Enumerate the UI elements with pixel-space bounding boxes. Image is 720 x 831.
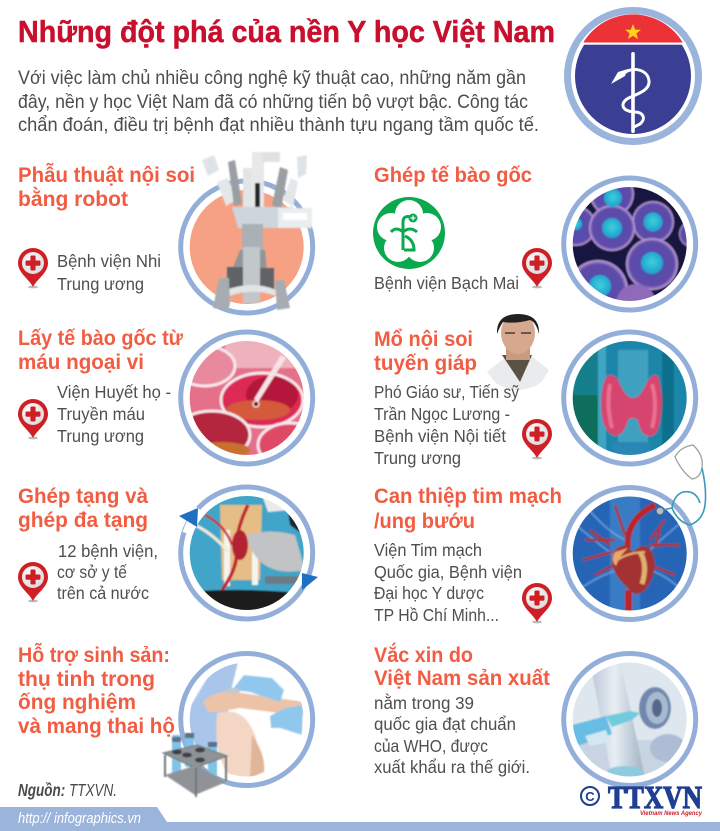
institutes text: TP Hồ Chí Minh... [374, 605, 499, 625]
description text: nằm trong 39 [374, 692, 474, 713]
heading: và mang thai hộ [18, 715, 175, 738]
institute text: Viện Huyết họ - [57, 382, 171, 402]
panel: organ transplant [18, 485, 318, 619]
intro text: đây, nền y học Việt Nam đã có những tiến bộ vượt bậc. Công tác [18, 92, 528, 113]
hospital text: Bệnh viện Bạch Mai [374, 273, 519, 293]
intro text: Với việc làm chủ nhiều công nghệ kỹ thuật cao, những năm gần [18, 68, 526, 89]
heading [18, 643, 175, 738]
icon: stethoscope [656, 445, 706, 525]
panel: reproductive support [18, 643, 313, 797]
intro text: chẩn đoán, điều trị bệnh đạt nhiều thành tựu ngang tầm quốc tế. [18, 115, 539, 136]
heading: tuyến giáp [374, 352, 477, 375]
heading [374, 643, 550, 690]
image: pregnant woman [181, 654, 313, 786]
heading: Lấy tế bào gốc từ [18, 327, 184, 350]
hospital text [57, 541, 158, 603]
image: stem cells [561, 176, 698, 312]
copyright mark: C [585, 789, 595, 804]
credentials text [374, 382, 519, 468]
image: vaccine vial and syringe [564, 654, 696, 786]
intro text [18, 68, 539, 136]
image: thyroid [564, 332, 696, 464]
description text [374, 692, 530, 777]
description text: quốc gia đạt chuẩn [374, 714, 516, 734]
institute text: Truyền máu [57, 404, 145, 424]
panel: cardiovascular / oncology intervention [374, 485, 696, 625]
credentials text: Trần Ngọc Lương - [374, 404, 510, 424]
icon: health ministry emblem [568, 10, 698, 142]
heading: Hỗ trợ sinh sản: [18, 643, 170, 667]
panel: peripheral blood stem cells [18, 327, 322, 467]
heading: Việt Nam sản xuất [374, 667, 550, 690]
heading [374, 328, 477, 375]
pin icon [522, 248, 552, 288]
panel: robotic surgery [18, 152, 313, 313]
heading: Ghép tạng và [18, 485, 148, 508]
heading: ghép đa tạng [18, 509, 148, 532]
source note: Nguồn: TTXVN. [18, 780, 117, 800]
website url: http:// infographics.vn [18, 810, 141, 827]
pin icon [522, 583, 552, 623]
heading: ống nghiệm [18, 691, 136, 714]
tagline: Vietnam News Agency [640, 810, 702, 817]
heading: bằng robot [18, 187, 128, 211]
arrow: lower right [302, 573, 318, 590]
hospital text: cơ sở y tế [57, 562, 127, 582]
institute text [57, 382, 171, 446]
hospital text: trên cả nước [57, 583, 149, 603]
logo: Bach Mai hospital [373, 197, 445, 269]
wordmark: TTXVN [608, 779, 702, 815]
heading [18, 327, 184, 374]
heading [18, 163, 195, 211]
footer bar [0, 807, 720, 831]
image: surgical robot [181, 152, 313, 313]
institutes text: Quốc gia, Bệnh viện [374, 562, 522, 582]
description text: của WHO, được [374, 736, 488, 756]
hospital text: Bệnh viện Nhi [57, 251, 161, 271]
heading: thụ tinh trong [18, 668, 155, 691]
credentials text: Trung ương [374, 448, 461, 468]
arrow: upper left [179, 508, 199, 533]
image: heart [564, 488, 696, 620]
hospital text: 12 bệnh viện, [58, 541, 158, 561]
institutes text: Đại học Y dược [374, 583, 484, 603]
heading: Phẫu thuật nội soi [18, 163, 195, 187]
panel: stem cell transplant [373, 164, 705, 324]
heading: Mổ nội soi [374, 328, 473, 351]
credentials text: Bệnh viện Nội tiết [374, 426, 506, 446]
portrait: doctor [487, 312, 549, 391]
heading: Vắc xin do [374, 643, 473, 667]
heading: /ung bướu [374, 510, 475, 533]
heading: Can thiệp tim mạch [374, 485, 562, 508]
credentials text: Phó Giáo sư, Tiến sỹ [374, 382, 519, 402]
institutes text [374, 540, 522, 625]
heading [374, 485, 562, 533]
pin icon [18, 399, 48, 439]
pin icon [522, 419, 552, 459]
icon: test tube rack [163, 733, 227, 797]
hospital text: Trung ương [57, 274, 144, 294]
heading: máu ngoại vi [18, 351, 144, 374]
hospital text [57, 251, 161, 294]
logo: TTXVN [581, 779, 702, 817]
panel: thyroid endoscopy [374, 312, 696, 468]
description text: xuất khẩu ra thế giới. [374, 757, 530, 777]
panel: vaccines [374, 643, 696, 786]
heading: Ghép tế bào gốc [374, 164, 532, 187]
institutes text: Viện Tim mạch [374, 540, 482, 560]
pin icon [18, 562, 48, 602]
institute text: Trung ương [57, 426, 144, 446]
title: Những đột phá của nền Y học Việt Nam [18, 14, 555, 49]
image: surgery with rotating arrows [179, 487, 318, 619]
pin icon [18, 248, 48, 288]
image: blood dish and pipette [174, 332, 322, 467]
heading [18, 485, 148, 532]
